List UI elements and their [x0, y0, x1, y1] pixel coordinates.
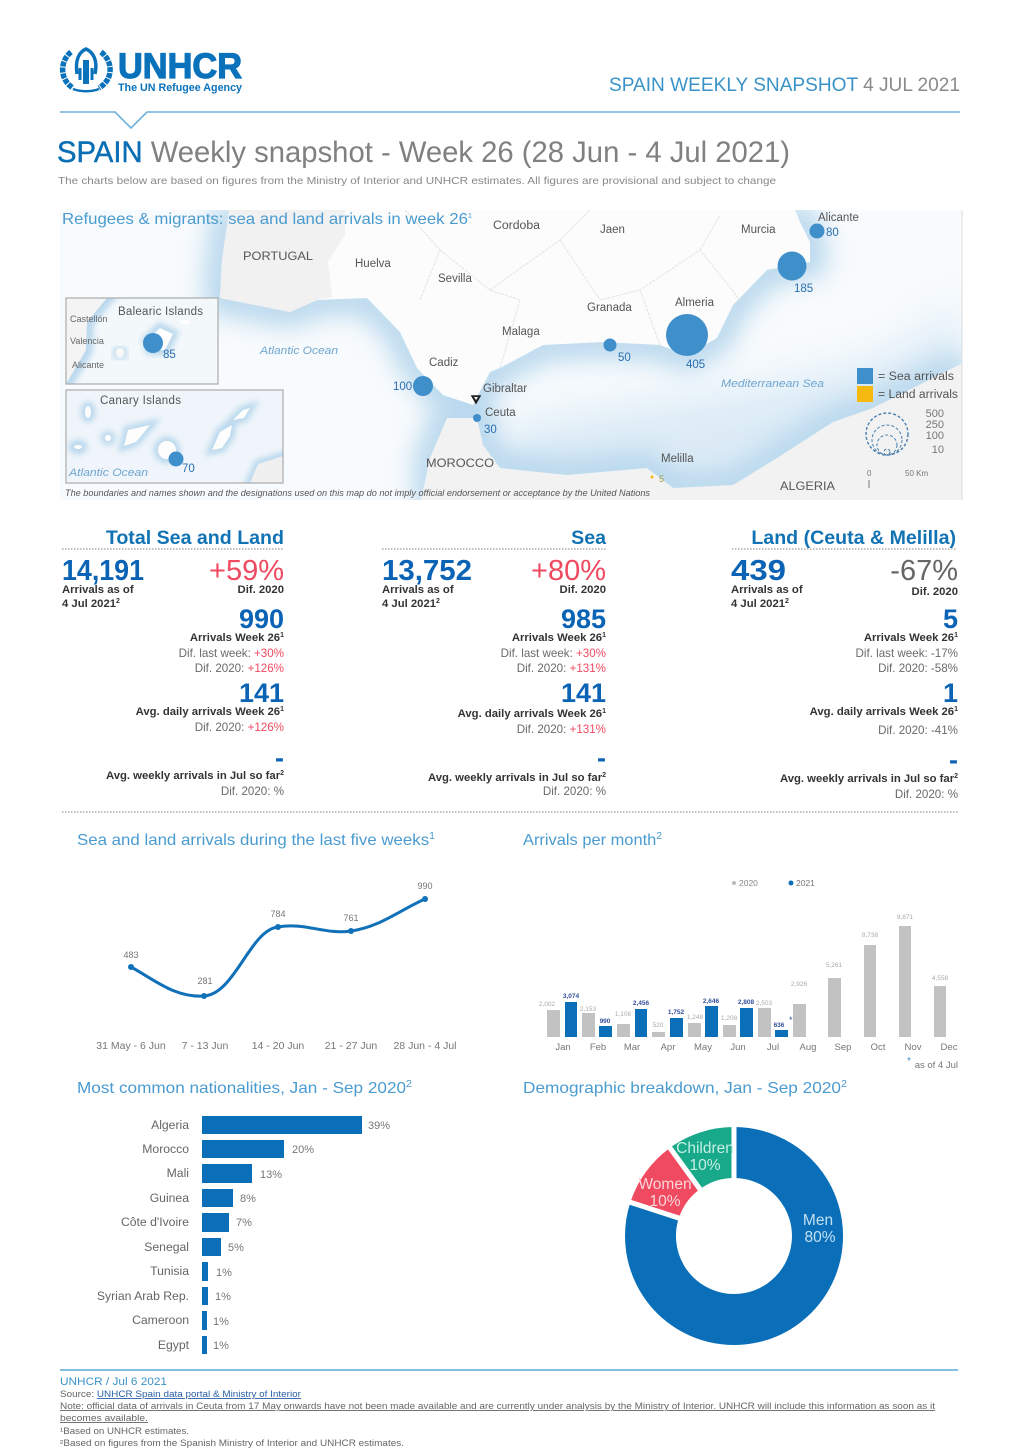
icon: UNHCR emblem — [63, 49, 110, 91]
bar chart: nationalities: Mali — [167, 1166, 189, 1180]
slice: men: 80% — [804, 1229, 836, 1246]
line chart: last five weeks: 281 — [197, 976, 213, 986]
weekly average: 2 — [954, 773, 958, 780]
weekly arrivals — [856, 604, 958, 675]
footer notes: Note: official data of arrivals in Ceuta from 17 May onwards have not been made available and are currently under analysis by the Ministry of Interior. UNHCR will include this information as soon as it — [60, 1401, 936, 1411]
bar chart: arrivals per month — [539, 878, 958, 1071]
bar chart: nationalities: 7% — [236, 1217, 252, 1229]
bar chart: arrivals per month: Jul — [767, 1042, 779, 1053]
weekly average: Dif. 2020: % — [221, 785, 284, 798]
weekly arrivals: Arrivals Week 26 — [512, 632, 602, 644]
bar chart: nationalities: 1% — [213, 1316, 229, 1328]
map place labels — [243, 212, 859, 493]
heading: arrivals per month: Arrivals per month — [523, 832, 653, 849]
bar chart: arrivals per month: 2,456 — [633, 1000, 650, 1007]
daily average: 1 — [280, 706, 284, 713]
line chart: last five weeks — [96, 881, 457, 1052]
weekly arrivals: Dif. 2020: -58% — [878, 662, 958, 675]
weekly arrivals: 1 — [602, 632, 606, 639]
panel: map of arrivals — [60, 205, 965, 510]
map place labels: Melilla — [661, 453, 694, 465]
daily average: 1 — [602, 708, 606, 715]
heading: arrivals per month: 2 — [656, 831, 662, 842]
slice: men: Men — [803, 1212, 833, 1229]
logo tagline: The UN Refugee Agency — [118, 82, 243, 94]
map place labels: Jaen — [600, 224, 625, 236]
weekly arrivals — [501, 604, 606, 675]
daily average: 1 — [943, 678, 958, 708]
difference 2020: -67% — [890, 555, 958, 587]
slice: children: Children — [676, 1140, 734, 1157]
map place labels: ALGERIA — [780, 481, 835, 493]
bar chart: arrivals per month: 2,153 — [580, 1006, 597, 1013]
weekly average — [780, 745, 958, 801]
map legend: 500 — [926, 408, 944, 420]
bar chart: arrivals per month: 2,808 — [738, 999, 755, 1006]
weekly arrivals: Dif. last week: +30% — [179, 647, 284, 660]
bar chart: nationalities: 1% — [213, 1340, 229, 1352]
daily average: Dif. 2020: -41% — [878, 724, 958, 737]
line chart: last five weeks: 7 - 13 Jun — [182, 1040, 229, 1052]
bar chart: nationalities: Egypt — [158, 1338, 190, 1352]
arrival bubbles: 50 — [618, 352, 631, 364]
arrival bubbles: 405 — [686, 359, 705, 371]
heading: demographic breakdown: 2 — [841, 1079, 847, 1090]
total arrivals: Arrivals as of — [731, 584, 803, 596]
bar chart: arrivals per month: Sep — [835, 1042, 851, 1053]
bar chart: arrivals per month: 8,738 — [862, 932, 879, 939]
bar chart: arrivals per month: Jun — [730, 1042, 746, 1053]
bar chart: nationalities: Syrian Arab Rep. — [97, 1289, 189, 1303]
map place labels: Almeria — [675, 297, 715, 309]
bar chart: arrivals per month: Mar — [624, 1042, 640, 1053]
slice: women: 10% — [649, 1193, 681, 1210]
weekly arrivals: Dif. 2020: +126% — [195, 662, 284, 675]
heading: Total Sea and Land — [106, 527, 284, 549]
bar chart: nationalities: Tunisia — [150, 1264, 189, 1278]
weekly average: Dif. 2020: % — [895, 788, 958, 801]
footer notes: becomes available. — [60, 1413, 148, 1423]
weekly arrivals: 990 — [239, 604, 284, 634]
bar chart: arrivals per month: 5,261 — [826, 962, 843, 969]
bar chart: arrivals per month: Feb — [590, 1042, 606, 1053]
map title: Refugees & migrants: sea and land arrivals in week 26 — [62, 211, 449, 228]
bar chart: arrivals per month: 9,871 — [897, 914, 914, 921]
heading: demographic breakdown: Demographic breakdown, Jan - Sep 2020 — [523, 1080, 818, 1097]
arrival bubbles: 5 — [659, 474, 664, 484]
weekly average: Avg. weekly arrivals in Jul so far — [106, 770, 280, 782]
bar chart: arrivals per month: 1,208 — [721, 1015, 738, 1022]
line chart: last five weeks: 990 — [417, 881, 433, 891]
bar chart: arrivals per month: 2,646 — [703, 998, 720, 1005]
weekly average: - — [949, 745, 958, 775]
footnote: as of 4 Jul — [915, 1060, 958, 1071]
inset: Balearic Islands: 85 — [163, 349, 176, 361]
footnote — [907, 1056, 958, 1071]
line chart: last five weeks: 21 - 27 Jun — [325, 1040, 377, 1052]
title: SPAIN Weekly snapshot - Week 26 (28 Jun - 4 Jul 2021) — [57, 136, 790, 169]
total arrivals: 4 Jul 2021 — [62, 598, 116, 610]
weekly average — [428, 743, 606, 798]
bar chart: arrivals per month: 3,074 — [563, 993, 580, 1000]
bar chart: nationalities: 20% — [292, 1144, 314, 1156]
bar chart: arrivals per month: 4,558 — [932, 975, 949, 982]
map place labels: Ceuta — [485, 407, 516, 419]
bar chart: arrivals per month: 2,503 — [756, 1000, 773, 1007]
logo wordmark: UNHCR — [118, 47, 242, 86]
bar chart: arrivals per month: 520 — [653, 1022, 664, 1029]
weekly average: - — [597, 743, 606, 773]
weekly average — [106, 743, 284, 798]
weekly arrivals: 1 — [954, 632, 958, 639]
weekly average: Dif. 2020: % — [543, 785, 606, 798]
daily average: Avg. daily arrivals Week 26 — [458, 708, 602, 720]
weekly average: - — [275, 743, 284, 773]
line chart: last five weeks: 28 Jun - 4 Jul — [393, 1040, 457, 1052]
inset: Balearic Islands: Alicante — [72, 360, 104, 370]
total arrivals — [62, 555, 144, 610]
footer notes: ²Based on figures from the Spanish Ministry of Interior and UNHCR estimates. — [60, 1438, 404, 1448]
bar chart: nationalities: Algeria — [151, 1118, 189, 1132]
bar chart: arrivals per month: 1,752 — [668, 1009, 685, 1016]
total arrivals: Arrivals as of — [62, 584, 134, 596]
map legend: 100 — [926, 430, 944, 442]
total arrivals — [731, 555, 803, 610]
bar chart: arrivals per month: 1,248 — [687, 1014, 704, 1021]
weekly arrivals: Dif. last week: -17% — [856, 647, 958, 660]
bar chart: arrivals per month: * — [789, 1015, 793, 1025]
arrival bubbles: 30 — [484, 424, 497, 436]
map title: 1 — [468, 213, 472, 220]
bar chart: nationalities: Senegal — [144, 1240, 189, 1254]
map legend: 250 — [926, 419, 944, 431]
heading: nationalities: Most common nationalities, Jan - Sep 2020 — [77, 1080, 384, 1097]
weekly arrivals: 985 — [561, 604, 606, 634]
daily average: 141 — [239, 678, 284, 708]
difference 2020: Dif. 2020 — [238, 584, 284, 596]
weekly arrivals: 1 — [280, 632, 284, 639]
chart legend — [732, 878, 815, 888]
bar chart: nationalities: 5% — [228, 1242, 244, 1254]
bar chart: arrivals per month: 1,108 — [615, 1011, 632, 1018]
bar chart: arrivals per month: Dec — [941, 1042, 958, 1053]
total arrivals: 2 — [116, 598, 120, 605]
map legend: 0 — [867, 469, 872, 478]
heading: five weeks chart: 1 — [429, 831, 435, 842]
daily average — [458, 678, 606, 736]
weekly arrivals: Dif. last week: +30% — [501, 647, 606, 660]
total arrivals: Arrivals as of — [382, 584, 454, 596]
map place labels: Alicante — [818, 212, 859, 224]
subtitle: The charts below are based on figures from the Ministry of Interior and UNHCR estimates. All figures are provisional and subject to change — [58, 175, 776, 187]
sea labels — [259, 345, 824, 390]
map place labels: PORTUGAL — [243, 251, 314, 263]
bar chart: nationalities: Guinea — [150, 1191, 189, 1205]
heading: Land (Ceuta & Melilla) — [751, 527, 956, 549]
chart legend: 2020 — [739, 878, 758, 888]
footnote: * — [907, 1056, 911, 1067]
weekly arrivals: 5 — [943, 604, 958, 634]
panel: land — [731, 527, 958, 801]
map place labels: MOROCCO — [426, 458, 494, 470]
bar chart: nationalities: 13% — [260, 1169, 282, 1181]
header: UNHCR logo — [63, 47, 243, 94]
footer notes: ¹Based on UNHCR estimates. — [60, 1426, 189, 1436]
map place labels: Sevilla — [438, 273, 472, 285]
slice: women: Women — [638, 1176, 692, 1193]
line chart: last five weeks: 784 — [270, 909, 286, 919]
weekly arrivals: Dif. 2020: +131% — [517, 662, 606, 675]
line chart: last five weeks: 31 May - 6 Jun — [96, 1040, 166, 1052]
inset: Canary Islands — [66, 390, 283, 483]
total arrivals: 4 Jul 2021 — [382, 598, 436, 610]
total arrivals: 2 — [436, 598, 440, 605]
slice: men — [623, 1124, 846, 1348]
panel: total sea and land — [62, 527, 284, 798]
inset: Canary Islands: 70 — [182, 463, 195, 475]
bar chart: nationalities: 39% — [368, 1120, 390, 1132]
total arrivals: 13,752 — [382, 555, 472, 587]
map place labels: Granada — [587, 302, 632, 314]
inset: Canary Islands: Atlantic Ocean — [68, 467, 148, 479]
map legend: 10 — [932, 444, 944, 456]
line chart: last five weeks: 14 - 20 Jun — [252, 1040, 304, 1052]
heading: five weeks chart: Sea and land arrivals during the last five weeks — [77, 832, 411, 849]
bar chart: nationalities: 1% — [215, 1291, 231, 1303]
map legend: 50 Km — [905, 469, 928, 478]
bar chart: arrivals per month: Jan — [555, 1042, 571, 1053]
bar chart: arrivals per month: Nov — [905, 1042, 922, 1053]
daily average: Avg. daily arrivals Week 26 — [136, 706, 280, 718]
bar chart: nationalities — [97, 1116, 390, 1354]
slice: children — [668, 1124, 734, 1191]
bar chart: nationalities: Côte d'Ivoire — [121, 1215, 189, 1229]
heading: nationalities: 2 — [406, 1079, 412, 1090]
daily average: Dif. 2020: +131% — [517, 723, 606, 736]
map legend — [857, 368, 958, 488]
slice: children: 10% — [689, 1157, 721, 1174]
map place labels: Malaga — [502, 326, 540, 338]
weekly arrivals — [179, 604, 284, 675]
inset: Balearic Islands — [66, 298, 218, 384]
weekly arrivals: Arrivals Week 26 — [864, 632, 954, 644]
arrival bubbles: 185 — [794, 283, 813, 295]
map place labels: Huelva — [355, 258, 391, 270]
bar chart: nationalities: Morocco — [142, 1142, 189, 1156]
inset: Balearic Islands: Valencia — [70, 336, 104, 346]
inset: Balearic Islands: Balearic Islands — [118, 306, 203, 318]
map legend: = Land arrivals — [878, 389, 958, 401]
total arrivals — [382, 555, 472, 610]
line chart: last five weeks: 483 — [123, 950, 139, 960]
footer notes: Source: UNHCR Spain data portal & Ministry of Interior — [60, 1389, 301, 1399]
map place labels: Murcia — [741, 224, 776, 236]
daily average — [136, 678, 284, 734]
total arrivals: 2 — [785, 598, 789, 605]
bar chart: arrivals per month: Oct — [871, 1042, 886, 1053]
bar chart: arrivals per month: 2,926 — [791, 981, 808, 988]
inset: Balearic Islands: Castellón — [70, 314, 108, 324]
line chart: last five weeks: 761 — [343, 913, 359, 923]
daily average — [810, 678, 958, 737]
weekly average: 2 — [280, 770, 284, 777]
total arrivals: 439 — [731, 555, 786, 587]
weekly average: 2 — [602, 772, 606, 779]
panel: sea — [382, 527, 607, 798]
map legend: = Sea arrivals — [878, 371, 954, 383]
arrival bubbles: 80 — [826, 227, 839, 239]
daily average: 1 — [954, 706, 958, 713]
daily average: Avg. daily arrivals Week 26 — [810, 706, 954, 718]
sea labels: Mediterranean Sea — [721, 378, 824, 390]
header label: SPAIN WEEKLY SNAPSHOT 4 JUL 2021 — [609, 75, 960, 96]
weekly average: Avg. weekly arrivals in Jul so far — [428, 772, 602, 784]
bar chart: nationalities: Cameroon — [132, 1313, 189, 1327]
bar chart: arrivals per month: 636 — [774, 1022, 785, 1029]
weekly average: Avg. weekly arrivals in Jul so far — [780, 773, 954, 785]
footer notes: UNHCR / Jul 6 2021 — [60, 1376, 167, 1388]
arrival bubbles — [393, 224, 839, 484]
bar chart: arrivals per month: Aug — [800, 1042, 816, 1053]
difference 2020: Dif. 2020 — [560, 584, 606, 596]
map disclaimer: The boundaries and names shown and the designations used on this map do not imply official endorsement or acceptance by the United Nations — [65, 488, 650, 498]
chart legend: 2021 — [796, 878, 815, 888]
sea labels: Atlantic Ocean — [259, 345, 338, 357]
bar chart: nationalities: 8% — [240, 1193, 256, 1205]
bar chart: arrivals per month: 2,002 — [539, 1001, 556, 1008]
difference 2020: +59% — [209, 555, 284, 587]
daily average: Dif. 2020: +126% — [195, 721, 284, 734]
daily average: 141 — [561, 678, 606, 708]
bar chart: arrivals per month: May — [694, 1042, 712, 1053]
footer notes — [60, 1376, 936, 1448]
bar chart: nationalities: 1% — [216, 1267, 232, 1279]
map place labels: Gibraltar — [483, 383, 527, 395]
weekly arrivals: Arrivals Week 26 — [190, 632, 280, 644]
map place labels: Cordoba — [493, 220, 541, 232]
map place labels: Cadiz — [429, 357, 459, 369]
heading: Sea — [571, 527, 607, 549]
bar chart: arrivals per month: 990 — [600, 1018, 611, 1025]
difference 2020: +80% — [531, 555, 606, 587]
donut chart: demographics — [623, 1124, 846, 1348]
bar chart: arrivals per month: Apr — [661, 1042, 675, 1053]
difference 2020: Dif. 2020 — [912, 586, 958, 598]
arrival bubbles: 100 — [393, 381, 412, 393]
total arrivals: 14,191 — [62, 555, 144, 587]
total arrivals: 4 Jul 2021 — [731, 598, 785, 610]
inset: Canary Islands: Canary Islands — [100, 395, 181, 407]
slice: women — [628, 1146, 701, 1219]
